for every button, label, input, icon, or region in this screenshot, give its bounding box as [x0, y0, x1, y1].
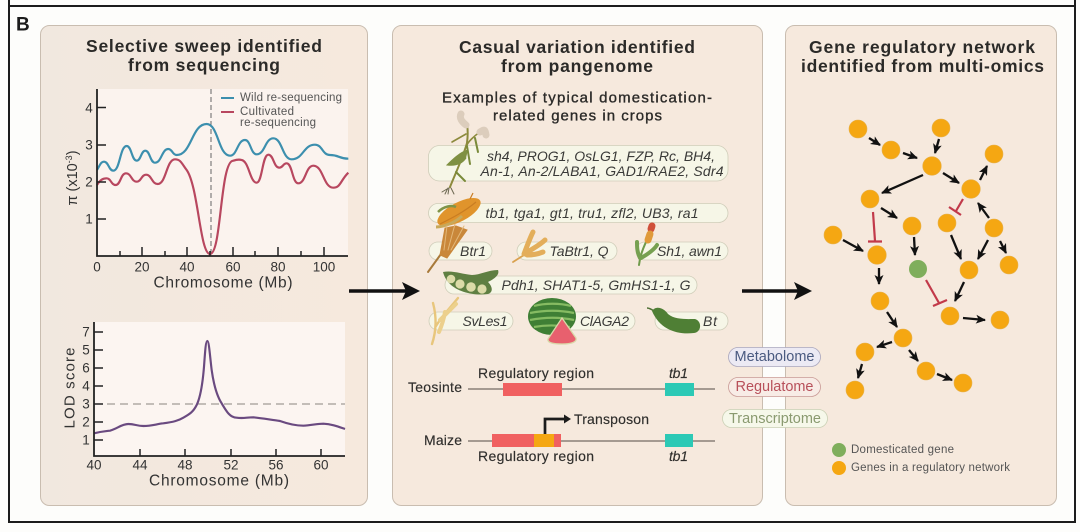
- gene diagram: teosinte: [408, 365, 715, 396]
- network legend: [832, 443, 1010, 475]
- network diagram: [824, 119, 1018, 399]
- gene pill: Bt: Bt: [703, 313, 718, 329]
- omics pill: transcriptome: Transcriptome: [729, 411, 821, 427]
- line chart: LOD score: LOD score: [62, 348, 78, 428]
- line chart: nucleotide diversity: Chromosome (Mb): [154, 274, 292, 292]
- icon: foxtail millet: [432, 298, 458, 344]
- icon: soybean pods: [443, 270, 498, 295]
- line chart: nucleotide diversity: 0: [93, 260, 101, 274]
- gene pill: Btr1: [429, 242, 492, 260]
- network legend: Domesticated gene: [851, 444, 954, 456]
- line chart: nucleotide diversity: ): [65, 150, 81, 155]
- heading: gene regulatory network: Gene regulatory network: [809, 37, 1035, 57]
- gene pill: Btr1: Btr1: [460, 243, 486, 259]
- gene diagram: maize: [424, 411, 715, 464]
- line chart: LOD score: 5: [82, 342, 90, 358]
- heading: causal variation: Casual variation identified: [459, 37, 695, 57]
- chart legend: [221, 92, 342, 129]
- icon: barley: [428, 224, 467, 272]
- line chart: nucleotide diversity: 40: [179, 260, 195, 274]
- line chart: LOD score: 60: [313, 458, 329, 472]
- icon: wheat: [513, 232, 545, 262]
- line chart: LOD score: [62, 322, 345, 490]
- line chart: LOD score: 1: [82, 432, 90, 448]
- gene pill: SvLes1: [429, 312, 513, 330]
- icon: cucumber: [647, 308, 700, 333]
- gene diagram: maize: Transposon: [574, 411, 649, 427]
- omics pill: metabolome: Metabolome: [734, 349, 814, 365]
- gene diagram: maize: tb1: [669, 448, 688, 464]
- gene diagram: teosinte: Regulatory region: [478, 365, 594, 381]
- line chart: LOD score: 48: [177, 458, 193, 472]
- line chart: nucleotide diversity: 60: [225, 260, 241, 274]
- line chart: LOD score: 52: [223, 458, 239, 472]
- gene pill: ClAGA2: [530, 312, 635, 330]
- heading: selective sweep: Selective sweep identified: [86, 36, 322, 56]
- gene pill: rice: An-1, An-2/LABA1, GAD1/RAE2, Sdr4: [480, 163, 724, 179]
- gene pill: SvLes1: SvLes1: [462, 313, 508, 329]
- line chart: LOD score: 44: [132, 458, 148, 472]
- gene diagram: teosinte: Teosinte: [408, 379, 462, 395]
- panel: causal variation: [392, 26, 762, 506]
- line chart: LOD score: 56: [268, 458, 284, 472]
- line chart: LOD score: 4: [82, 378, 90, 394]
- gene pill: soybean: Pdh1, SHAT1-5, GmHS1-1, G: [502, 277, 691, 293]
- subheading: examples: Examples of typical domestication-: [442, 90, 712, 106]
- line chart: LOD score: 3: [82, 396, 90, 412]
- icon: sorghum: [637, 226, 657, 265]
- line chart: nucleotide diversity: 80: [270, 260, 286, 274]
- network legend: Genes in a regulatory network: [851, 462, 1010, 474]
- line chart: nucleotide diversity: 4: [85, 100, 93, 116]
- panel: gene regulatory network: [786, 26, 1056, 506]
- line chart: LOD score: 2: [82, 414, 90, 430]
- gene pill: Sh1: Sh1, awn1: [657, 243, 722, 259]
- icon: rice plant: [442, 114, 486, 194]
- gene pill: rice: [428, 146, 728, 181]
- panel letter B: B: [16, 14, 30, 36]
- icon: watermelon: [528, 298, 576, 344]
- icon: maize cob: [433, 192, 485, 232]
- subheading: examples: [442, 90, 712, 124]
- line chart: LOD score: Chromosome (Mb): [149, 472, 289, 490]
- gene pill: TaBtr1: TaBtr1, Q: [550, 243, 609, 259]
- gene pill: maize: [428, 204, 728, 222]
- line chart: LOD score: 7: [82, 324, 90, 340]
- gene pill: rice: sh4, PROG1, OsLG1, FZP, Rc, BH4,: [487, 148, 715, 164]
- gene pill: TaBtr1: [517, 242, 617, 260]
- line chart: nucleotide diversity: 1: [85, 212, 93, 226]
- line chart: nucleotide diversity: 2: [85, 174, 93, 190]
- gene diagram: maize: Maize: [424, 432, 462, 448]
- gene pill: soybean: [445, 276, 697, 294]
- line chart: nucleotide diversity: 3: [85, 138, 93, 152]
- arrow: sweep to variation: [349, 282, 420, 300]
- line chart: LOD score: 6: [82, 360, 90, 376]
- heading: selective sweep: [86, 36, 322, 75]
- gene pill: ClAGA2: ClAGA2: [580, 313, 629, 329]
- line chart: nucleotide diversity: [64, 89, 348, 292]
- heading: gene regulatory network: [801, 37, 1044, 76]
- heading: selective sweep: from sequencing: [128, 55, 280, 75]
- line chart: nucleotide diversity: 20: [134, 260, 150, 274]
- heading: causal variation: from pangenome: [501, 56, 653, 76]
- gene pill: maize: tb1, tga1, gt1, tru1, zfl2, UB3, ra1: [486, 205, 698, 221]
- gene pill: Sh1: [636, 242, 728, 260]
- gene pill: Bt: [655, 312, 728, 330]
- arrow: variation to network: [742, 282, 812, 300]
- arrow: transposon: [545, 419, 566, 434]
- heading: gene regulatory network: identified from multi-omics: [801, 56, 1044, 76]
- chart legend: re-sequencing: [240, 117, 316, 129]
- chart legend: Cultivated: [240, 106, 294, 118]
- chart legend: Wild re-sequencing: [240, 92, 342, 104]
- gene diagram: teosinte: tb1: [669, 365, 688, 381]
- line chart: LOD score: 40: [86, 458, 102, 472]
- omics pill: regulatome: Regulatome: [736, 379, 814, 395]
- gene diagram: maize: Regulatory region: [478, 448, 594, 464]
- panel: selective sweep: [40, 26, 368, 506]
- subheading: examples: related genes in crops: [493, 108, 662, 124]
- line chart: nucleotide diversity: π (x10: [65, 163, 81, 206]
- line chart: nucleotide diversity: -3: [64, 155, 74, 163]
- heading: causal variation: [459, 37, 695, 76]
- line chart: nucleotide diversity: 100: [313, 260, 335, 274]
